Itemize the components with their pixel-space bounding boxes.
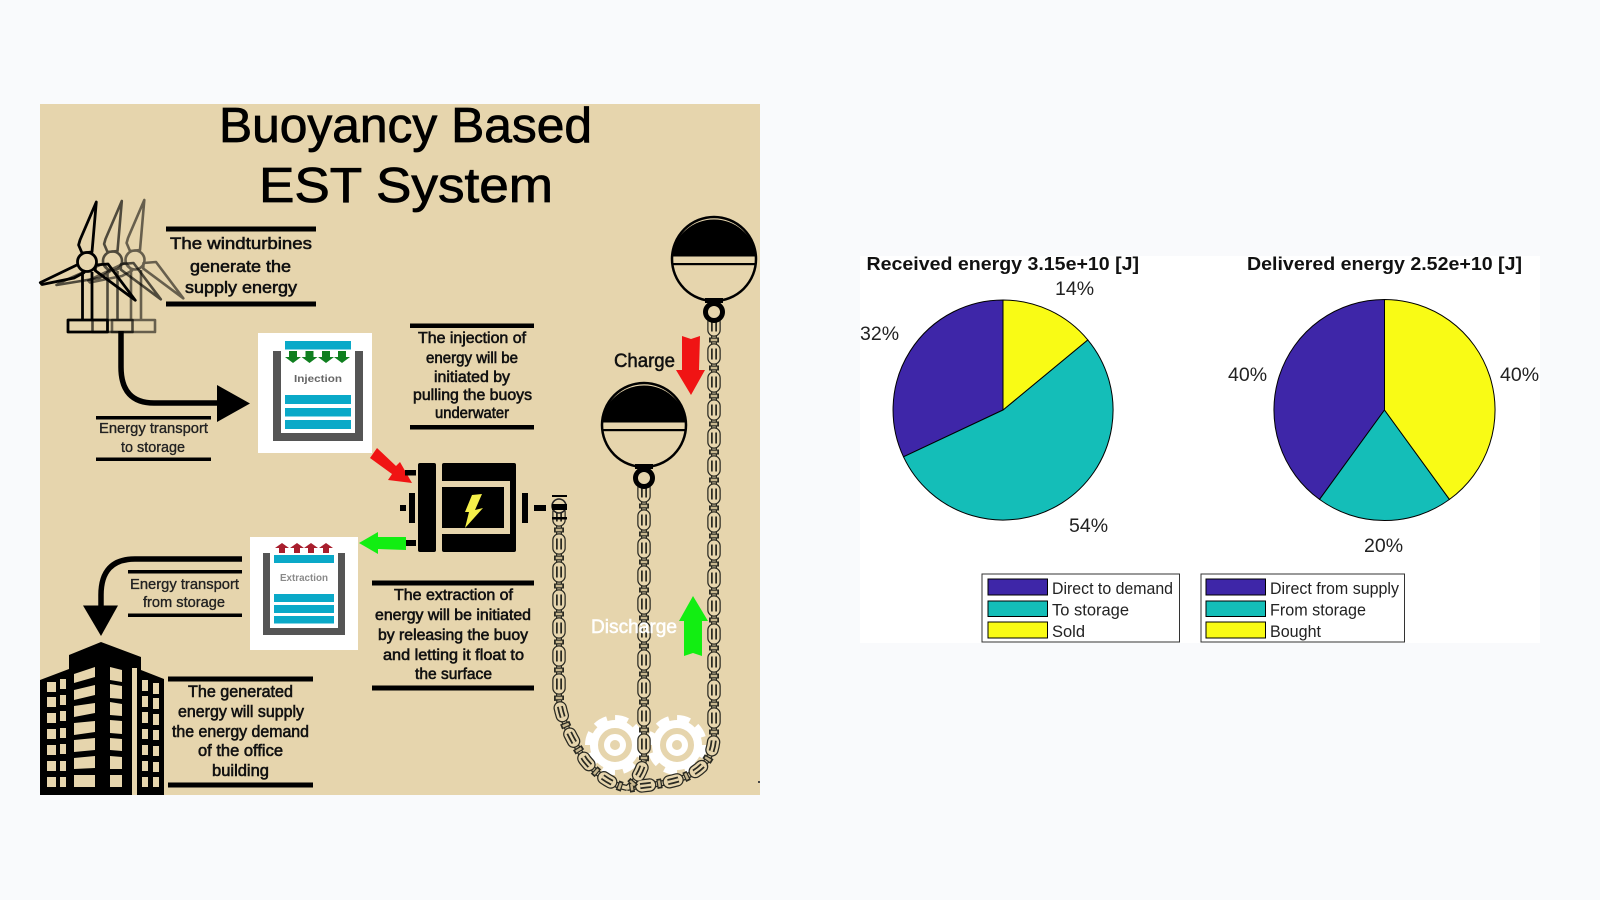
text: wind turbines generate supply bbox=[166, 226, 316, 306]
title: EST System bbox=[259, 159, 553, 213]
legend: received energy: Sold bbox=[1052, 623, 1085, 641]
chart title: received energy: Received energy 3.15e+10 [J] bbox=[866, 254, 1139, 274]
text: generated energy explanation: the energy demand bbox=[172, 722, 309, 741]
label: charge: Charge bbox=[614, 351, 675, 372]
text: energy transport to storage bbox=[96, 416, 211, 461]
legend: delivered energy: Direct from supply bbox=[1270, 580, 1400, 598]
pie labels: received energy: 14% bbox=[1055, 278, 1094, 300]
pie labels: received energy bbox=[860, 278, 1108, 537]
panel: pie charts bbox=[860, 254, 1540, 643]
text: energy transport from storage: Energy transport bbox=[130, 576, 240, 593]
text: energy transport to storage: to storage bbox=[121, 439, 185, 456]
pie labels: delivered energy bbox=[1228, 364, 1539, 557]
text: extraction explanation: The extraction of bbox=[394, 587, 514, 604]
arrow: charge down bbox=[676, 336, 705, 395]
text: injection explanation bbox=[410, 324, 534, 430]
text: wind turbines generate supply: The windturbines bbox=[170, 234, 312, 253]
pie labels: delivered energy: 40% bbox=[1500, 364, 1539, 386]
arrow: green out of motor bbox=[359, 532, 406, 554]
arrow: turbines to storage bbox=[121, 331, 250, 422]
icon: upper buoy bbox=[672, 217, 756, 320]
chains bbox=[559, 322, 714, 788]
arrow: storage to building bbox=[83, 559, 242, 636]
legend: delivered energy: From storage bbox=[1270, 602, 1366, 620]
legend: received energy: Direct to demand bbox=[1052, 580, 1173, 598]
text: generated energy explanation bbox=[168, 676, 313, 788]
arrow: discharge up bbox=[679, 596, 708, 656]
pie labels: received energy: 54% bbox=[1069, 515, 1108, 537]
title: Buoyancy Based bbox=[219, 99, 592, 153]
text: injection explanation: initiated by bbox=[434, 369, 510, 386]
pie labels: delivered energy: 20% bbox=[1364, 535, 1403, 557]
legend: received energy: To storage bbox=[1052, 602, 1129, 620]
pie labels: received energy: 32% bbox=[860, 323, 899, 345]
chart title: delivered energy: Delivered energy 2.52e+10 [J] bbox=[1247, 254, 1522, 274]
icon: injection storage bbox=[258, 333, 372, 453]
icon: extraction storage: Extraction bbox=[280, 573, 328, 584]
legend: delivered energy: Bought bbox=[1270, 623, 1321, 641]
icon: wind turbines bbox=[40, 200, 183, 332]
text: extraction explanation: the surface bbox=[415, 666, 492, 683]
legend: received energy bbox=[982, 574, 1180, 642]
text: energy transport from storage: from storage bbox=[143, 594, 225, 611]
text: generated energy explanation: energy will supply bbox=[178, 702, 304, 721]
text: injection explanation: pulling the buoys bbox=[413, 387, 532, 404]
text: injection explanation: underwater bbox=[435, 405, 510, 422]
pie labels: delivered energy: 40% bbox=[1228, 364, 1267, 386]
icon: chain end fitting bbox=[552, 495, 567, 520]
pie chart: delivered energy bbox=[1274, 300, 1495, 521]
legend: delivered energy bbox=[1201, 574, 1404, 642]
text: generated energy explanation: The generated bbox=[188, 682, 293, 701]
icon: motor generator bbox=[400, 463, 546, 552]
text: energy transport from storage bbox=[128, 570, 242, 617]
text: generated energy explanation: of the office bbox=[198, 741, 283, 760]
text: injection explanation: energy will be bbox=[426, 350, 518, 367]
text: wind turbines generate supply: supply energy bbox=[185, 278, 298, 297]
icon: lower buoy bbox=[602, 383, 686, 486]
text: wind turbines generate supply: generate the bbox=[190, 257, 291, 276]
pie chart: received energy bbox=[893, 300, 1113, 520]
text: generated energy explanation: building bbox=[212, 761, 269, 780]
text: extraction explanation: and letting it float to bbox=[383, 647, 524, 664]
icon: office building bbox=[40, 642, 164, 795]
panel: buoyancy system diagram bbox=[40, 99, 760, 795]
text: energy transport to storage: Energy transport bbox=[99, 420, 209, 437]
title bbox=[219, 99, 592, 213]
text: injection explanation: The injection of bbox=[418, 330, 527, 347]
icon: extraction storage bbox=[250, 537, 358, 650]
text: extraction explanation: energy will be initiated bbox=[375, 607, 531, 624]
text: extraction explanation bbox=[372, 580, 534, 690]
icon: gears bbox=[589, 719, 703, 771]
text: extraction explanation: by releasing the buoy bbox=[378, 627, 528, 644]
icon: injection storage: Injection bbox=[294, 373, 342, 385]
arrow: red into motor bbox=[370, 448, 412, 483]
label: discharge: Discharge bbox=[591, 617, 677, 638]
